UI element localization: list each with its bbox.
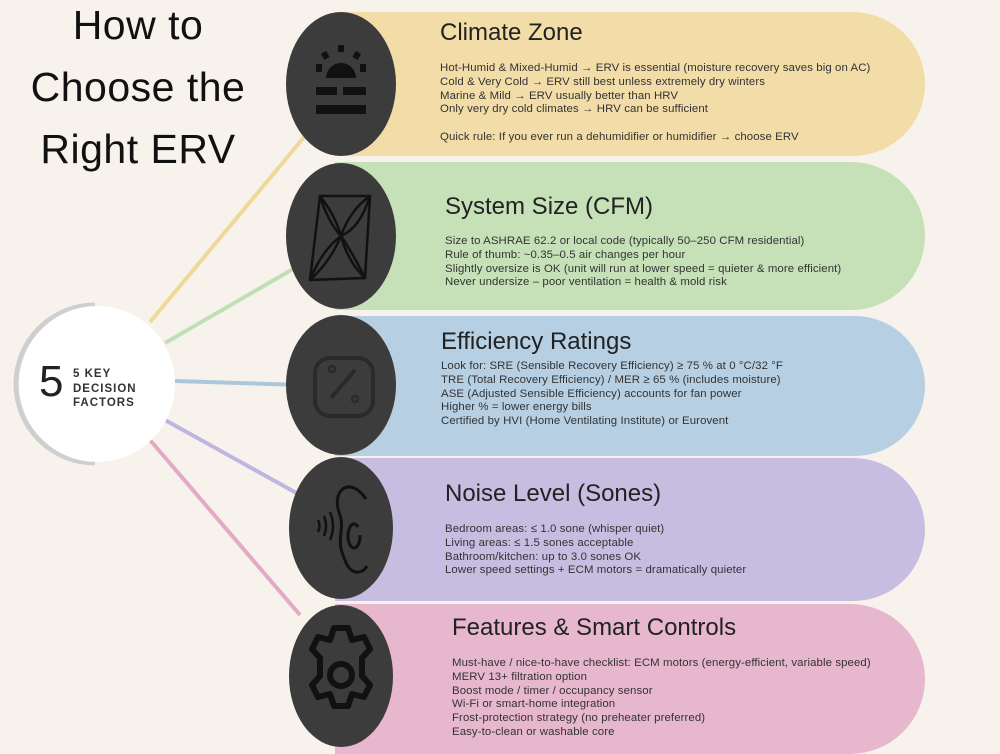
icon: percent	[286, 315, 396, 455]
text: efficiency ratings: TRE (Total Recovery Efficiency) / MER ≥ 65 % (includes moisture)	[441, 374, 781, 386]
text: climate zone: Only very dry cold climates → HRV can be sufficient	[440, 103, 708, 115]
heading: features: Features & Smart Controls	[452, 614, 736, 641]
text: features	[452, 657, 871, 738]
text: system size: Size to ASHRAE 62.2 or local code (typically 50–250 CFM residential)	[445, 235, 804, 247]
icon: ear	[289, 457, 393, 599]
text: system size: Never undersize – poor ventilation = health & mold risk	[445, 276, 727, 288]
text: efficiency ratings: Higher % = lower energy bills	[441, 401, 592, 413]
text: climate zone: Hot-Humid & Mixed-Humid → ERV is essential (moisture recovery saves big on AC)	[440, 62, 870, 74]
text: system size	[445, 235, 841, 288]
text: efficiency ratings: Certified by HVI (Home Ventilating Institute) or Eurovent	[441, 415, 728, 427]
text: efficiency ratings: Look for: SRE (Sensible Recovery Efficiency) ≥ 75 % at 0 °C/32 °F	[441, 360, 783, 372]
text: features: Frost-protection strategy (no preheater preferred)	[452, 712, 705, 724]
text: system size: Rule of thumb: ~0.35–0.5 air changes per hour	[445, 249, 685, 261]
heading: climate zone: Climate Zone	[440, 19, 583, 46]
text: climate zone: Cold & Very Cold → ERV still best unless extremely dry winters	[440, 76, 765, 88]
text: features: Boost mode / timer / occupancy sensor	[452, 685, 653, 697]
text: climate zone: Quick rule: If you ever run a dehumidifier or humidifier → choose ERV	[440, 131, 799, 143]
hub circle: 5 key decision factors: 5 KEY	[73, 368, 111, 380]
text: efficiency ratings	[441, 360, 783, 427]
text: system size: Slightly oversize is OK (unit will run at lower speed = quieter & more efficient)	[445, 263, 841, 275]
title: Choose the	[31, 64, 245, 110]
panel: noise	[335, 458, 925, 601]
hub circle: 5 key decision factors: 5	[39, 357, 63, 406]
panel: climate zone	[335, 12, 925, 156]
title	[31, 2, 245, 172]
panel: features	[335, 604, 925, 754]
icon: gear	[289, 605, 393, 747]
text: features: Easy-to-clean or washable core	[452, 726, 615, 738]
text: climate zone: Marine & Mild → ERV usually better than HRV	[440, 90, 678, 102]
hub circle: 5 key decision factors	[14, 302, 175, 466]
icon: pinwheel	[286, 163, 396, 309]
text: efficiency ratings: ASE (Adjusted Sensible Efficiency) accounts for fan power	[441, 388, 742, 400]
text: noise level: Living areas: ≤ 1.5 sones acceptable	[445, 537, 633, 549]
title: How to	[73, 2, 203, 48]
text: climate zone	[440, 62, 870, 143]
text: features: Must-have / nice-to-have checklist: ECM motors (energy-efficient, variable speed)	[452, 657, 871, 669]
icon: sunrise	[286, 12, 396, 156]
text: features: Wi-Fi or smart-home integration	[452, 698, 615, 710]
text: noise level	[445, 523, 746, 576]
title: Right ERV	[40, 126, 236, 172]
panel: system size	[335, 162, 925, 310]
hub circle: 5 key decision factors: DECISION	[73, 382, 137, 394]
text: features: MERV 13+ filtration option	[452, 671, 587, 683]
heading: system size: System Size (CFM)	[445, 193, 653, 220]
text: noise level: Bedroom areas: ≤ 1.0 sone (whisper quiet)	[445, 523, 664, 535]
heading: noise level: Noise Level (Sones)	[445, 480, 661, 507]
hub circle: 5 key decision factors: FACTORS	[73, 397, 135, 409]
text: noise level: Lower speed settings + ECM motors = dramatically quieter	[445, 564, 746, 576]
heading: efficiency ratings: Efficiency Ratings	[441, 328, 631, 355]
text: noise level: Bathroom/kitchen: up to 3.0 sones OK	[445, 551, 641, 563]
panel: efficiency	[335, 316, 925, 456]
